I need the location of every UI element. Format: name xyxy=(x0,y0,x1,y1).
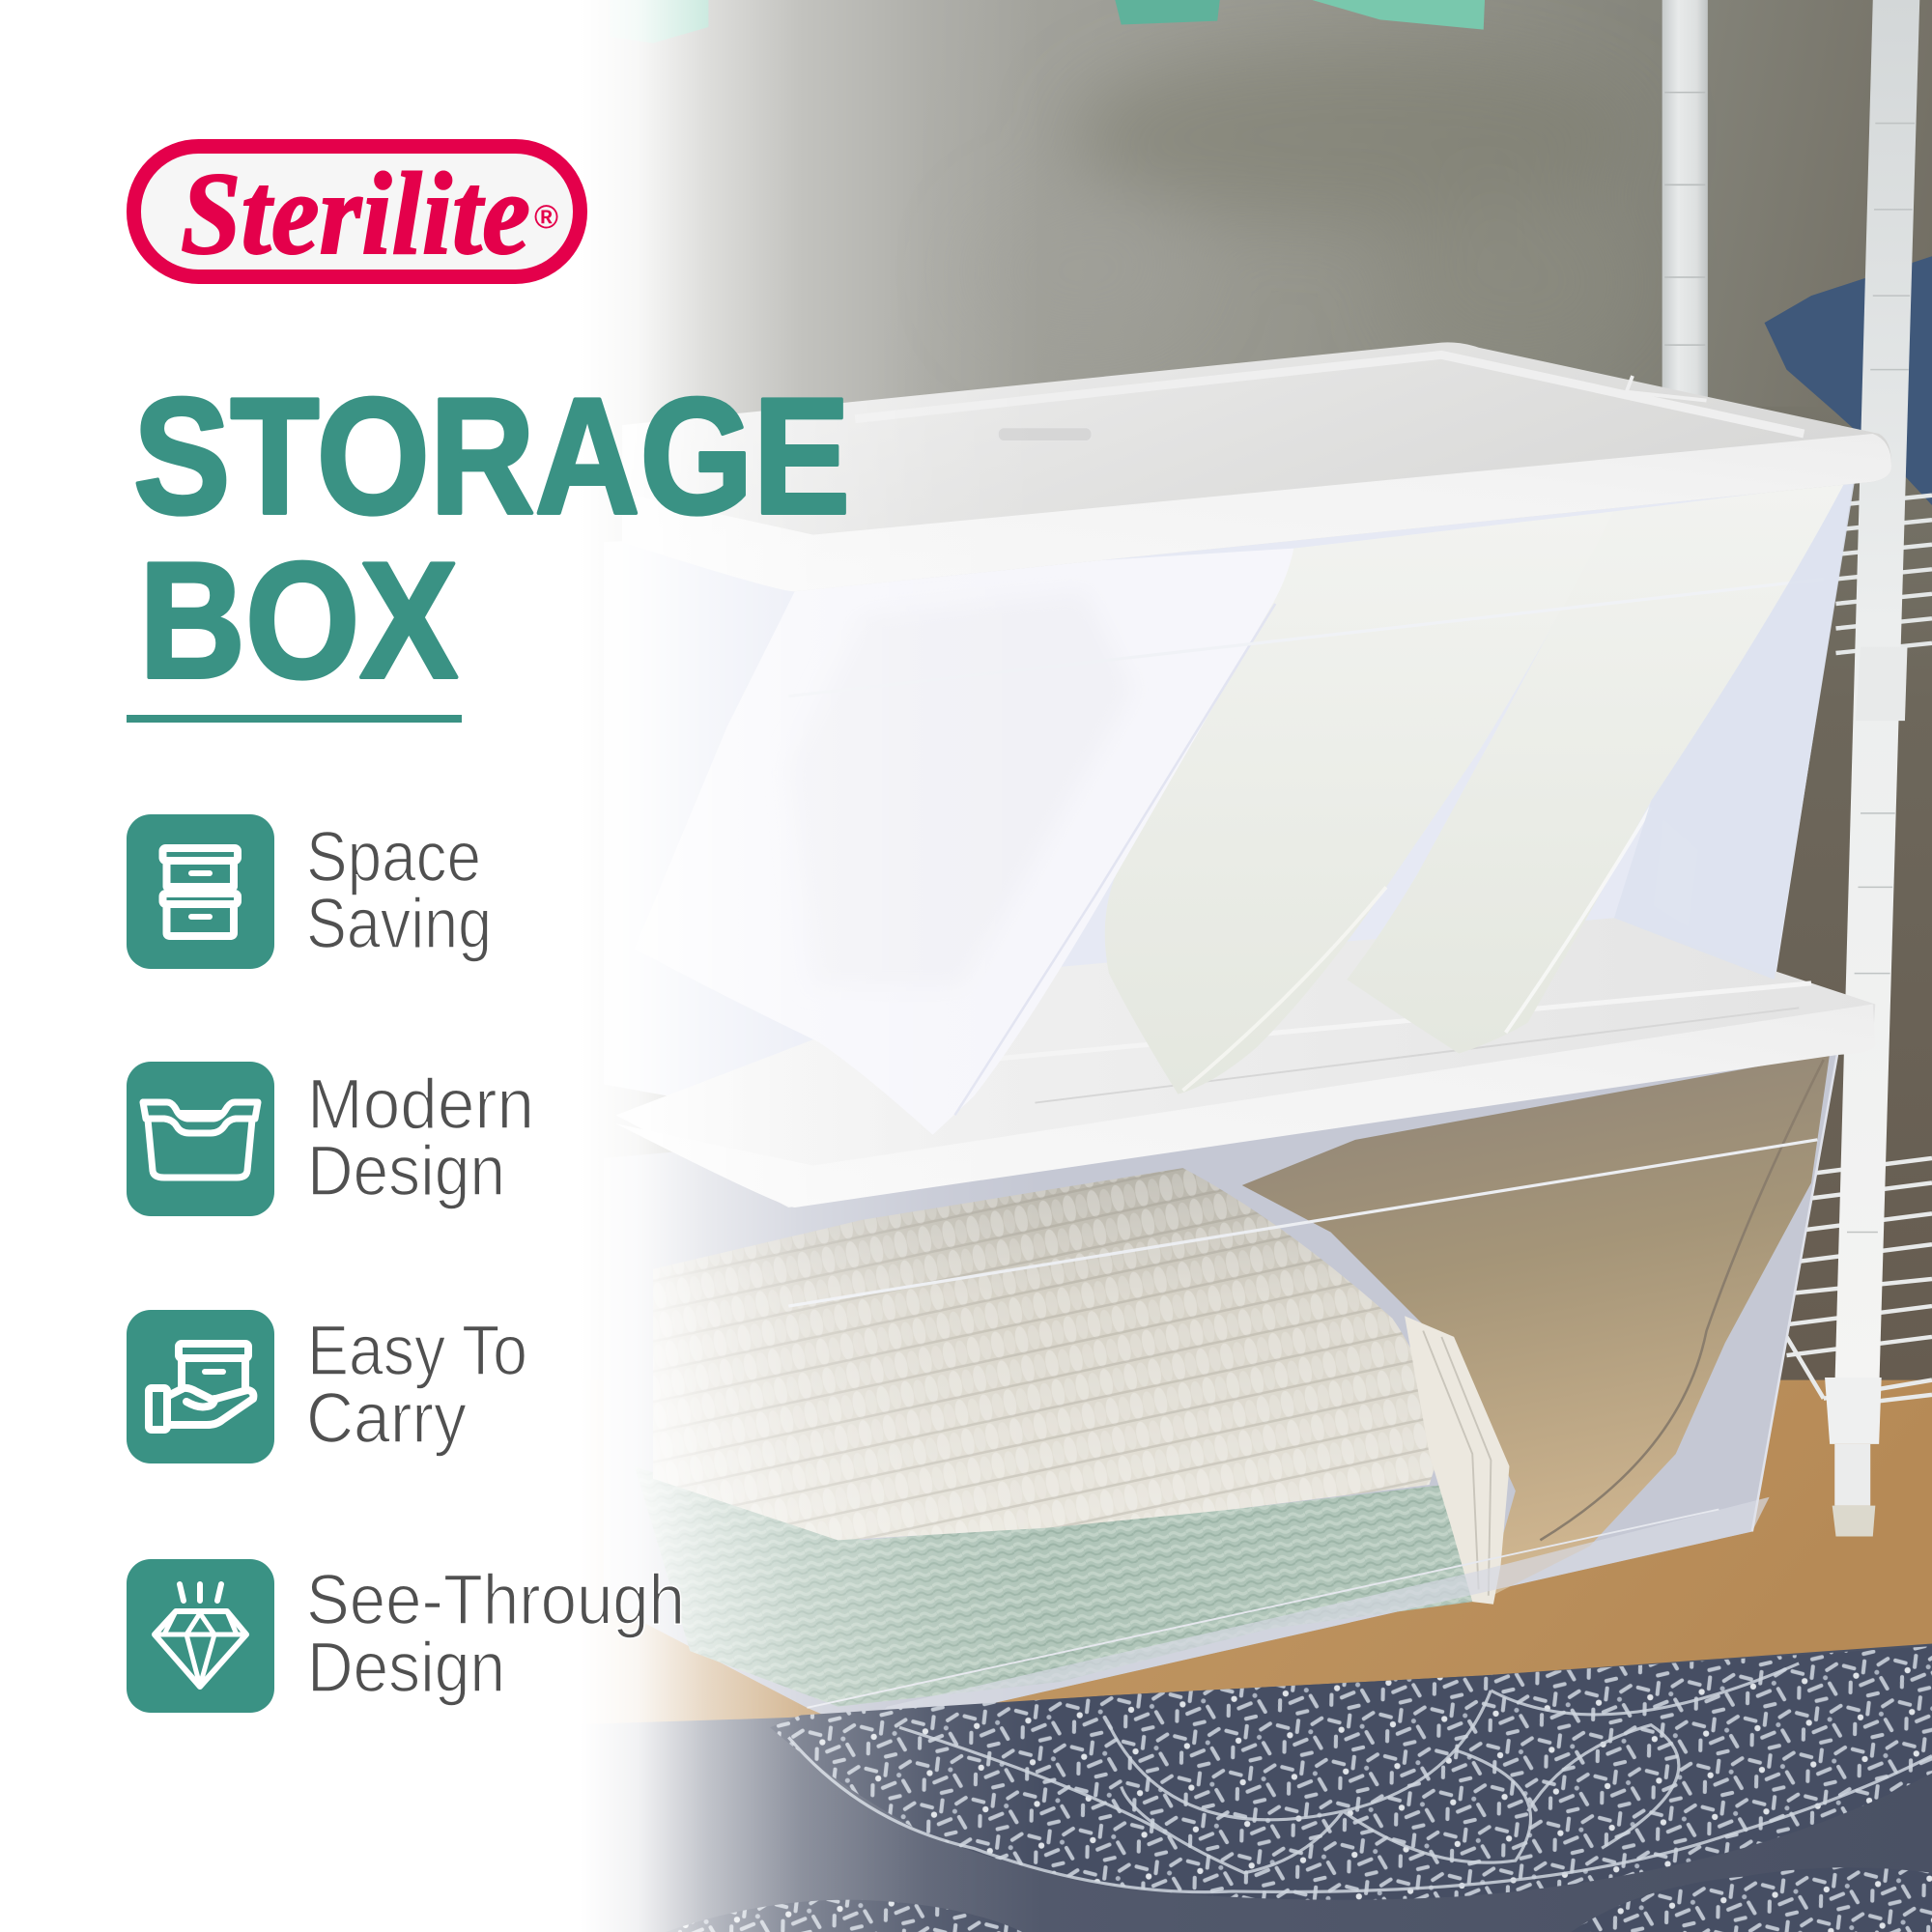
label second line: Design xyxy=(307,1629,505,1707)
upper wire shelf xyxy=(1836,496,1932,653)
back pillow xyxy=(1347,483,1844,1054)
title line one: STORAGE xyxy=(133,364,850,549)
front white pillow xyxy=(635,549,1293,1135)
upper box front sheen line xyxy=(788,579,1824,696)
lower box front panel sheen and bottom edge xyxy=(788,1048,1838,1732)
wooden floor xyxy=(493,1380,1932,1731)
title line two: BOX xyxy=(139,528,458,713)
feature: easy to carry xyxy=(127,1310,527,1463)
label: Easy To xyxy=(307,1312,527,1390)
label second line: Carry xyxy=(306,1379,467,1458)
upper box lid xyxy=(622,342,1891,591)
label second line: Design xyxy=(307,1132,505,1210)
blue pillow on the shelf xyxy=(1765,256,1932,505)
icon tile: hand holding box xyxy=(127,1310,274,1463)
upper box: translucent body xyxy=(604,474,1855,1109)
wall blotches xyxy=(974,49,1638,370)
registered mark: ® xyxy=(534,199,558,236)
icon tile: stacked boxes xyxy=(127,814,274,969)
title xyxy=(127,364,850,723)
Sterilite logo xyxy=(133,147,580,279)
photo background wall xyxy=(370,0,1932,1725)
label second line: Saving xyxy=(306,885,492,963)
feature: see-through design xyxy=(127,1559,685,1713)
lower box: translucent body xyxy=(604,1047,1838,1732)
cream knit blanket xyxy=(653,1168,1439,1540)
rug medallion pattern xyxy=(770,1646,1932,1900)
title underline xyxy=(127,715,462,723)
back shelf pole xyxy=(1662,0,1708,407)
logo wordmark: Sterilite xyxy=(181,149,530,279)
label: Modern xyxy=(307,1065,534,1144)
feature: space saving xyxy=(127,814,492,969)
upper box right wall tint xyxy=(1614,483,1855,980)
logo oval badge xyxy=(133,147,580,276)
rug second medallion lower right xyxy=(1571,1867,1932,1932)
rug medallion outlines xyxy=(788,1663,1932,1892)
lower wire shelf xyxy=(1786,1158,1932,1405)
lower box lid xyxy=(616,918,1875,1208)
icon tile: diamond xyxy=(127,1559,274,1713)
middle pillow xyxy=(1105,511,1614,1094)
label: See-Through xyxy=(306,1561,685,1639)
tan pillow inside lower box xyxy=(1242,1054,1830,1600)
teal clothes hanging at top xyxy=(610,0,1485,43)
blanket fringe xyxy=(1405,1316,1509,1605)
rug second medallion lower left xyxy=(666,1900,1023,1932)
patterned rug xyxy=(370,1644,1932,1932)
icon tile: lidded tub xyxy=(127,1062,274,1216)
feature: modern design xyxy=(127,1062,534,1216)
green knit blanket xyxy=(635,1466,1472,1707)
label: Space xyxy=(306,818,481,896)
wall shading right of box xyxy=(1749,407,1932,1392)
front shelf pole xyxy=(1825,0,1919,1537)
